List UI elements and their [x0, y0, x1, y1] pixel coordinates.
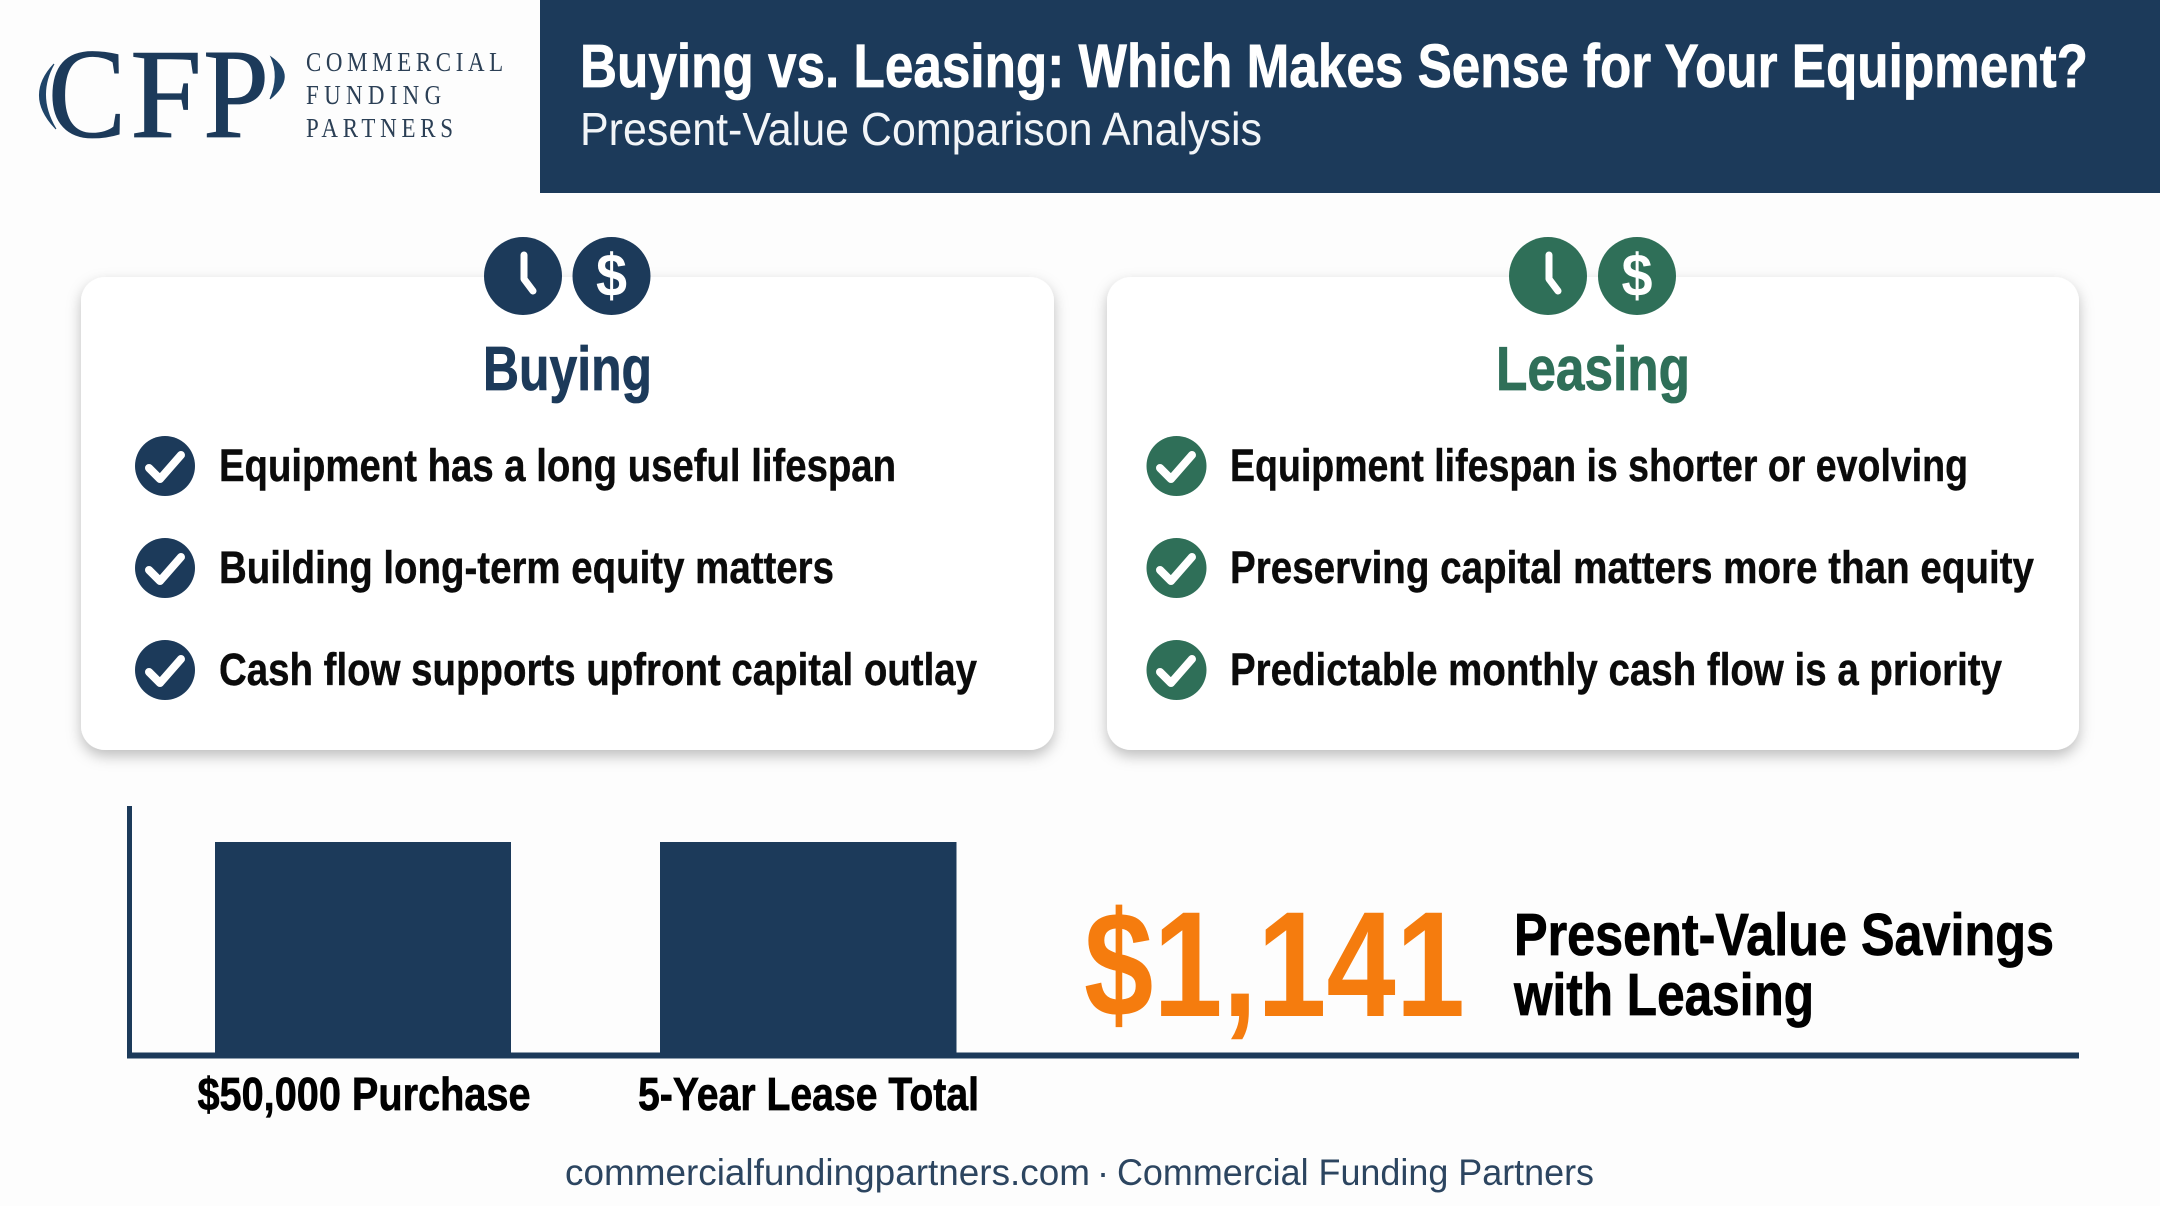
heading: buying: Buying — [483, 335, 652, 404]
heading: leasing: Leasing — [1496, 335, 1690, 404]
list item 3 — [135, 640, 977, 700]
label: purchase: $50,000 Purchase — [198, 1068, 530, 1120]
list item 2: Building long-term equity matters — [219, 542, 834, 593]
footer: commercialfundingpartners.com — [565, 1152, 1090, 1193]
list item 2 — [135, 538, 834, 598]
list item 2 — [1146, 538, 2034, 598]
callout: savings figure: $1,141 — [1084, 880, 1465, 1048]
footer: · — [1097, 1152, 1109, 1193]
panel: leasing — [1107, 237, 2079, 750]
logo: Commercial Funding Partners: F — [130, 23, 202, 165]
bar chart — [127, 806, 2079, 1120]
icon: clock — [484, 237, 562, 315]
footer — [565, 1152, 1594, 1193]
panel: buying — [81, 237, 1054, 750]
bar: purchase — [215, 842, 511, 1058]
list item 3 — [1146, 640, 2002, 700]
list item 1: Equipment has a long useful lifespan — [219, 440, 896, 491]
icon: dollar — [1598, 237, 1676, 315]
list item 1: Equipment lifespan is shorter or evolving — [1230, 440, 1968, 491]
list item 3: Predictable monthly cash flow is a priority — [1230, 644, 2002, 695]
callout: savings caption — [1513, 902, 2054, 1028]
logo: Commercial Funding Partners: C — [48, 23, 126, 165]
logo: Commercial Funding Partners: PARTNERS — [306, 114, 453, 143]
icon: dollar — [572, 237, 650, 315]
logo: Commercial Funding Partners: COMMERCIAL — [306, 48, 503, 77]
logo: Commercial Funding Partners: FUNDING — [306, 81, 441, 110]
bar: lease — [660, 842, 956, 1058]
logo: Commercial Funding Partners — [39, 23, 503, 165]
subtitle: Present-Value Comparison Analysis — [580, 103, 1262, 155]
footer: Commercial Funding Partners — [1117, 1152, 1594, 1193]
label: lease: 5-Year Lease Total — [638, 1068, 979, 1120]
list item 2: Preserving capital matters more than equity — [1230, 542, 2034, 593]
callout: savings caption: with Leasing — [1513, 962, 1814, 1028]
icon: clock — [1509, 237, 1587, 315]
list item 1 — [1146, 436, 1968, 496]
callout: savings caption: Present-Value Savings — [1514, 902, 2054, 968]
list item 1 — [135, 436, 896, 496]
icon: dollar: $ — [1622, 242, 1652, 309]
list item 3: Cash flow supports upfront capital outlay — [219, 644, 977, 695]
icon: dollar: $ — [596, 242, 627, 309]
header banner — [540, 0, 2160, 193]
logo: Commercial Funding Partners: P — [203, 23, 269, 165]
